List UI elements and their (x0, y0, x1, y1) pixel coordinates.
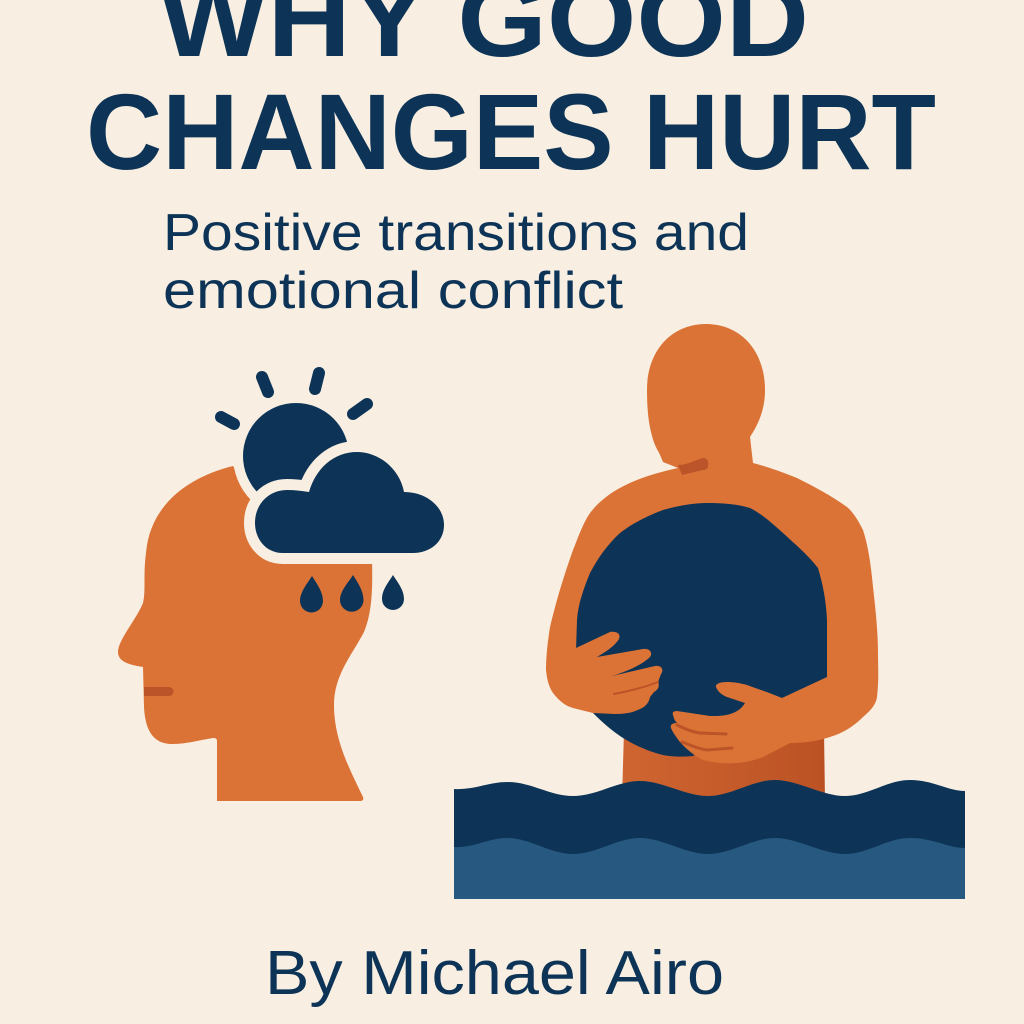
head (647, 324, 765, 462)
cloud (255, 452, 444, 553)
head profile (118, 466, 372, 801)
body and arms (546, 420, 878, 743)
figure holding ball in water (546, 324, 878, 800)
mouth (144, 687, 174, 696)
icon: head silhouette with weather (118, 373, 444, 801)
right hand (671, 680, 835, 763)
sun rays (221, 373, 367, 424)
sun (243, 403, 349, 509)
neck shadow (678, 458, 708, 475)
lower torso (622, 730, 825, 800)
light wave (454, 838, 965, 899)
title: CHANGES HURT (86, 71, 936, 192)
rain drops (300, 575, 404, 612)
title (86, 0, 936, 192)
ball (576, 503, 827, 757)
dark wave (454, 780, 965, 899)
author: By Michael Airo (265, 939, 724, 1008)
finger lines (614, 682, 732, 750)
subtitle: Positive transitions and (163, 204, 749, 262)
subtitle (163, 204, 749, 320)
water waves (454, 780, 965, 899)
left hand (550, 632, 662, 714)
subtitle: emotional conflict (163, 262, 624, 320)
